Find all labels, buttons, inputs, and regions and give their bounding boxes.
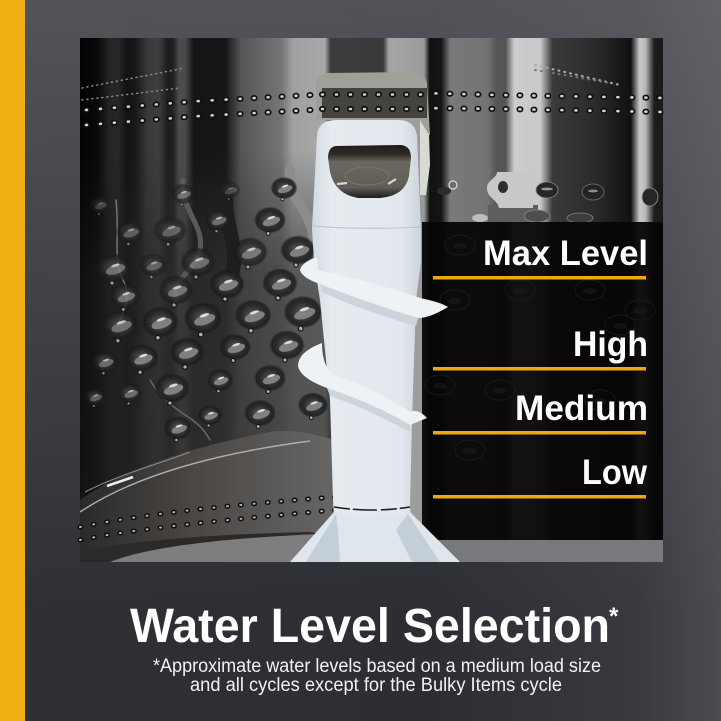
photo: stainless steel washer drum <box>80 38 665 562</box>
level label: Max Level: Max Level <box>483 234 648 273</box>
level label: Max Level <box>433 234 648 280</box>
level label: High: High <box>573 325 648 364</box>
level label: Low: Low <box>582 453 648 492</box>
level label: Low <box>433 453 648 498</box>
drum lower curved band <box>80 431 335 562</box>
level label: Medium <box>433 389 648 434</box>
title: Water Level Selection <box>130 600 610 653</box>
title asterisk: * <box>609 603 619 630</box>
spiral fin lower <box>298 343 427 425</box>
spiral fin upper <box>300 257 448 318</box>
drum dimples <box>84 177 328 442</box>
footnote: and all cycles except for the Bulky Items cycle <box>190 675 562 696</box>
faint reflections in panel <box>425 235 655 460</box>
yellow side bar <box>0 0 25 721</box>
agitator column <box>312 120 421 520</box>
agitator window <box>328 145 411 198</box>
agitator base <box>290 512 460 562</box>
footnote: *Approximate water levels based on a medium load size <box>153 656 601 677</box>
agitator <box>290 72 460 562</box>
level label: High <box>433 325 648 370</box>
dark label panel <box>422 222 663 540</box>
wavy reflections <box>116 170 314 440</box>
footnote <box>153 656 601 696</box>
agitator top cap <box>316 72 430 135</box>
drum perforation rows <box>82 65 665 125</box>
right drum detail above the panel <box>437 172 658 223</box>
level label: Medium: Medium <box>515 389 648 428</box>
